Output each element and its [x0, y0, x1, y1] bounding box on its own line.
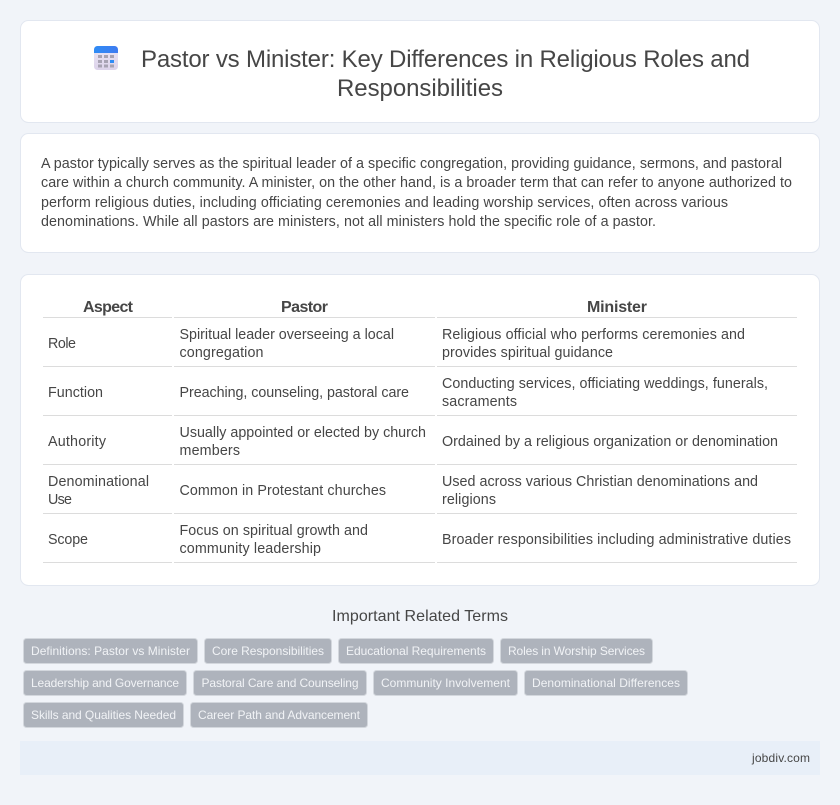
tag: Pastoral Care and Counseling — [202, 676, 358, 690]
row: denominational use: Used across various Christian denominations and — [442, 474, 758, 490]
row: authority: Authority — [48, 434, 107, 450]
row: function: sacraments — [442, 394, 517, 410]
related terms heading: Important Related Terms — [332, 608, 508, 625]
tag: Skills and Qualities Needed — [31, 708, 176, 722]
tag — [204, 638, 332, 664]
row: scope — [48, 523, 791, 557]
tag — [524, 670, 688, 696]
tag — [374, 670, 518, 696]
row: role: congregation — [180, 345, 264, 361]
table header: Minister — [587, 299, 647, 316]
tag: Leadership and Governance — [31, 676, 179, 690]
title — [141, 46, 750, 102]
tag — [500, 638, 652, 664]
row: function: Preaching, counseling, pastoral care — [180, 385, 409, 401]
row: denominational use: religions — [442, 492, 496, 508]
header card — [20, 20, 820, 122]
table header: Pastor — [281, 299, 328, 316]
tag: Roles in Worship Services — [508, 644, 645, 658]
intro paragraph: denominations. While all pastors are ministers, not all ministers hold the specific role of a pastor. — [41, 214, 656, 230]
tag — [190, 702, 368, 728]
comparison table panel — [20, 274, 820, 586]
row: authority — [48, 425, 778, 459]
tag — [194, 670, 366, 696]
row: scope: community leadership — [180, 541, 321, 557]
row: authority: Ordained by a religious organization or denomination — [442, 434, 778, 450]
row: role: Religious official who performs ceremonies and — [442, 327, 745, 343]
table header — [83, 299, 647, 316]
row: function: Function — [48, 385, 103, 401]
intro paragraph: A pastor typically serves as the spiritual leader of a specific congregation, providing guidance, sermons, and pastoral — [41, 156, 782, 172]
row: authority: Usually appointed or elected by church — [180, 425, 426, 441]
intro paragraph: perform religious duties, including officiating ceremonies and leading worship services, often across various — [41, 195, 728, 211]
tag — [24, 670, 186, 696]
row: scope: Focus on spiritual growth and — [180, 523, 368, 539]
tag — [24, 638, 198, 664]
row: denominational use — [48, 474, 758, 508]
row: role: provides spiritual guidance — [442, 345, 613, 361]
tag: Career Path and Advancement — [198, 708, 361, 722]
tag: Community Involvement — [381, 676, 511, 690]
intro paragraph: care within a church community. A minister, on the other hand, is a broader term that can refer to anyone authorized to — [41, 175, 792, 191]
row: function — [48, 376, 768, 410]
icon: calendar — [94, 46, 118, 70]
intro paragraph — [41, 156, 792, 230]
row: denominational use: Common in Protestant churches — [180, 483, 386, 499]
table header: Aspect — [83, 299, 134, 316]
related term tags — [24, 638, 688, 728]
tag — [24, 702, 184, 728]
row: role — [48, 327, 745, 361]
row: denominational use: Use — [48, 492, 72, 508]
footer source: jobdiv.com — [751, 751, 810, 765]
row: role: Role — [48, 336, 76, 352]
row: function: Conducting services, officiating weddings, funerals, — [442, 376, 768, 392]
row: role: Spiritual leader overseeing a local — [180, 327, 394, 343]
footer — [20, 741, 820, 775]
row: denominational use: Denominational — [48, 474, 149, 490]
tag: Core Responsibilities — [212, 644, 324, 658]
tag: Educational Requirements — [346, 644, 486, 658]
intro panel — [20, 134, 820, 252]
tag: Denominational Differences — [532, 676, 680, 690]
row: scope: Scope — [48, 532, 88, 548]
tag — [338, 638, 494, 664]
row: authority: members — [180, 443, 240, 459]
title: Responsibilities — [337, 75, 503, 102]
row: scope: Broader responsibilities including administrative duties — [442, 532, 791, 548]
tag: Definitions: Pastor vs Minister — [31, 644, 190, 658]
title: Pastor vs Minister: Key Differences in Religious Roles and — [141, 46, 750, 73]
